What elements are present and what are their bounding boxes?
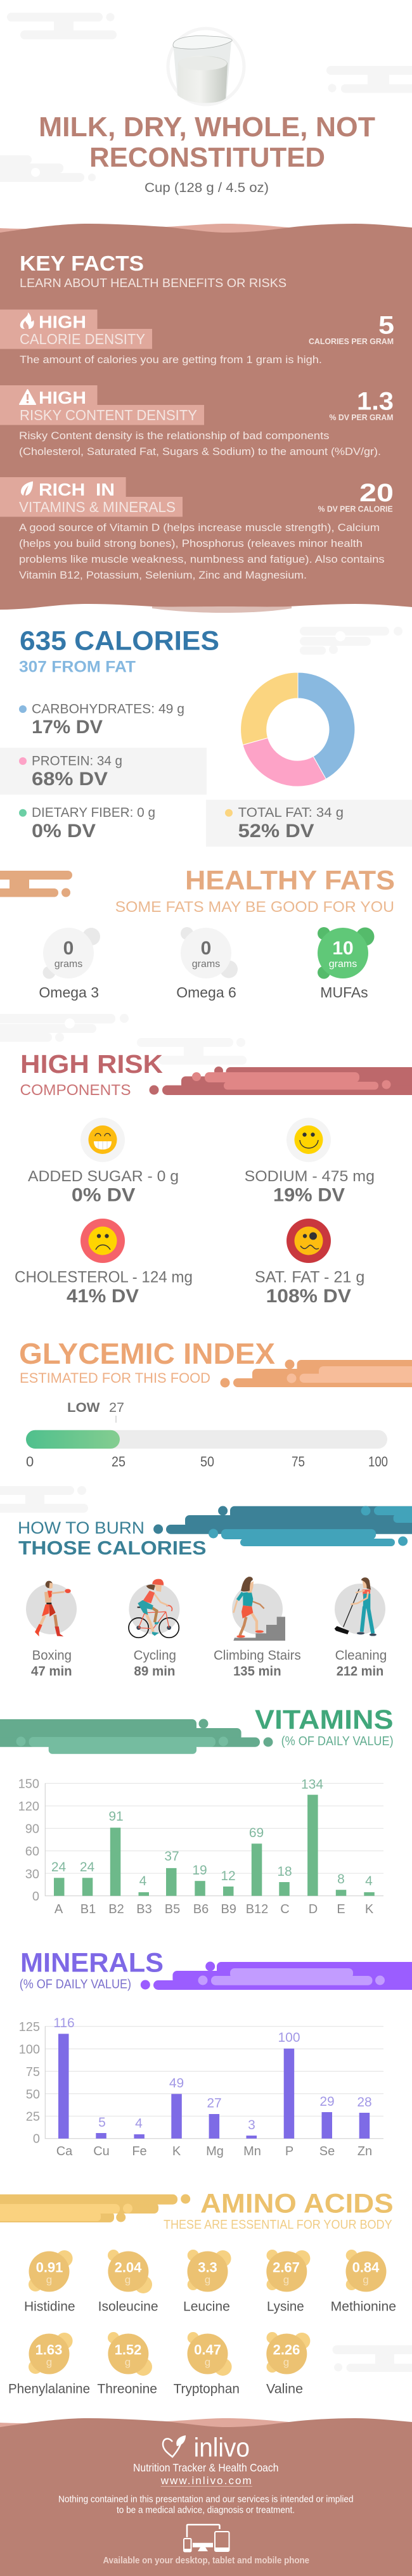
decoration: orange bars	[0, 871, 72, 897]
background cloud: amino acids	[332, 2345, 412, 2372]
amino: leucine: Leucine	[183, 2300, 230, 2314]
bar chart: vitamins: 69	[249, 1826, 264, 1840]
fact: rich in vitamins and minerals: 20	[359, 479, 394, 507]
bar chart: vitamins: 134	[301, 1778, 323, 1792]
fact: calorie density	[0, 309, 394, 366]
decoration: red bars	[150, 1067, 412, 1095]
panel: key facts	[0, 224, 412, 613]
macro: protein: 68% DV	[32, 769, 108, 790]
activity: climbing stairs: Climbing Stairs	[214, 1648, 301, 1663]
bar chart: vitamins: 8	[337, 1872, 345, 1887]
panel: high risk components	[15, 1049, 412, 1307]
fact: risky content density: % DV PER GRAM	[330, 413, 393, 422]
amino: histidine: 0.91	[36, 2260, 63, 2276]
macro: total fat	[225, 805, 344, 842]
fat: omega 3: grams	[55, 959, 82, 970]
fact: rich in vitamins and minerals: problems like muscle weakness, numbness and fatigue). Also contains	[19, 554, 385, 565]
bar chart: minerals: 3	[248, 2118, 255, 2132]
bar chart: minerals: 25	[26, 2110, 40, 2124]
risk: sodium: SODIUM - 475 mg	[245, 1168, 375, 1185]
activity: cleaning	[335, 1577, 387, 1679]
macro: total fat: TOTAL FAT: 34 g	[238, 805, 344, 820]
macro: carbohydrates: 17% DV	[32, 717, 103, 738]
fact: calorie density: HIGH	[39, 312, 86, 332]
bar chart: vitamins: A	[55, 1902, 63, 1916]
icon: flame	[20, 312, 34, 329]
bar chart: vitamins: B2	[108, 1902, 124, 1916]
amino: phenylalanine: Phenylalanine	[8, 2382, 90, 2397]
risk: sodium	[245, 1118, 375, 1205]
activity: cleaning: 212 min	[337, 1664, 383, 1679]
bar chart: minerals: Cu	[93, 2144, 110, 2158]
risk: added sugar	[28, 1118, 179, 1205]
fat: omega 3: 0	[63, 938, 74, 959]
website link: www.inlivo.com	[160, 2475, 252, 2487]
heading: minerals: (% OF DAILY VALUE)	[20, 1978, 131, 1992]
background cloud: right	[326, 66, 412, 93]
glycemic scale bar: 0	[26, 1454, 34, 1470]
fat: MUFAs: MUFAs	[320, 984, 368, 1001]
panel: calories	[0, 626, 412, 847]
icon: glass of milk	[168, 29, 244, 105]
bar chart: minerals: 0	[33, 2132, 40, 2146]
logo: inlivo: inlivo	[194, 2433, 250, 2463]
activity: cleaning: Cleaning	[335, 1648, 387, 1663]
icon: leaf	[21, 482, 33, 496]
heading: healthy fats: SOME FATS MAY BE GOOD FOR YOU	[115, 899, 394, 916]
panel: footer	[0, 2418, 412, 2576]
bar chart: minerals: Mg	[206, 2144, 224, 2158]
macro: dietary fiber	[19, 805, 155, 842]
risk: saturated fat: 108% DV	[266, 1286, 351, 1307]
amino: phenylalanine	[8, 2333, 90, 2397]
background cloud: calories	[300, 627, 402, 655]
heading: burn calories	[18, 1518, 207, 1559]
panel: healthy fats	[0, 866, 395, 1001]
heading: minerals: MINERALS	[20, 1948, 164, 1978]
bar chart: vitamins: 4	[139, 1874, 147, 1888]
fat: MUFAs: 10	[332, 938, 354, 959]
macro: dietary fiber: 0% DV	[32, 821, 96, 842]
icon: person sweeping	[335, 1577, 377, 1636]
activity: boxing: 47 min	[31, 1664, 72, 1679]
bar chart: minerals: 5	[98, 2115, 106, 2130]
amino: valine: 2.26	[273, 2342, 300, 2358]
decoration: yellow bars	[0, 2194, 190, 2222]
bar chart: minerals: Se	[319, 2144, 335, 2158]
amino: threonine: Threonine	[97, 2382, 157, 2397]
heading: minerals	[20, 1948, 164, 1992]
amino: isoleucine: 2.04	[115, 2260, 142, 2276]
fact: rich in vitamins and minerals	[0, 477, 394, 581]
logo: inlivo	[163, 2433, 250, 2463]
bar chart: vitamins: 150	[18, 1778, 39, 1791]
bar chart: minerals: Ca	[56, 2144, 73, 2158]
heading: vitamins: (% OF DAILY VALUE)	[281, 1734, 394, 1748]
fact: rich in vitamins and minerals: RICH IN	[39, 480, 115, 499]
heading: healthy fats: HEALTHY FATS	[185, 866, 395, 896]
amino: valine: g	[283, 2356, 289, 2368]
bar chart: vitamins	[18, 1778, 383, 1916]
serving size: Cup (128 g / 4.5 oz)	[145, 181, 269, 195]
background cloud: top left	[7, 13, 117, 39]
amino: leucine: 3.3	[198, 2260, 217, 2276]
fact: risky content density: Risky Content density is the relationship of bad components	[19, 430, 330, 442]
glycemic value	[67, 1400, 124, 1423]
decoration: teal bars	[153, 1506, 412, 1546]
activity: boxing	[26, 1581, 77, 1679]
glycemic scale bar: 25	[112, 1454, 126, 1470]
activity: climbing stairs: 135 min	[233, 1664, 281, 1679]
fat: omega 6	[176, 927, 238, 1001]
amino: isoleucine: g	[125, 2274, 131, 2286]
bar chart: minerals: K	[172, 2144, 181, 2158]
amino: leucine	[183, 2250, 231, 2314]
heading: high risk: HIGH RISK	[20, 1049, 163, 1079]
fact: risky content density: RISKY CONTENT DENSITY	[20, 407, 197, 423]
amino: tryptophan: 0.47	[194, 2342, 221, 2358]
background cloud: burn	[0, 1486, 88, 1513]
bar chart: vitamins: B9	[221, 1902, 236, 1916]
amino: lysine: Lysine	[267, 2300, 304, 2314]
bar chart: vitamins: 91	[108, 1809, 124, 1824]
amino: threonine: 1.52	[115, 2342, 141, 2358]
bar chart: vitamins: D	[309, 1902, 318, 1916]
heading: high risk: COMPONENTS	[20, 1082, 131, 1099]
bar chart: minerals: 50	[26, 2088, 40, 2102]
panel: minerals	[19, 1948, 412, 2158]
fact: calorie density: The amount of calories you are getting from 1 gram is high.	[20, 354, 322, 366]
icon: boxer	[35, 1581, 71, 1636]
title: RECONSTITUTED	[89, 142, 325, 173]
fact: rich in vitamins and minerals: VITAMINS & MINERALS	[19, 499, 176, 515]
heading: key facts: KEY FACTS	[20, 252, 144, 275]
bar chart: minerals: Zn	[357, 2144, 372, 2158]
disclaimer: to be a medical advice, diagnosis or treatment.	[117, 2506, 295, 2516]
amino: isoleucine	[98, 2250, 158, 2314]
amino: histidine: Histidine	[24, 2300, 75, 2314]
bar chart: minerals	[19, 2016, 383, 2158]
bar chart: vitamins: 19	[192, 1863, 207, 1878]
icon: smiling face	[294, 1125, 323, 1154]
fact: risky content density	[0, 385, 394, 458]
amino: tryptophan: g	[205, 2356, 210, 2368]
amino: threonine: g	[125, 2356, 131, 2368]
panel: amino acids	[0, 2189, 396, 2397]
panel: vitamins	[0, 1705, 394, 1916]
fact: rich in vitamins and minerals: % DV PER CALORIE	[318, 504, 393, 513]
title	[39, 112, 375, 173]
amino: lysine: 2.67	[273, 2260, 300, 2276]
amino: valine	[266, 2332, 310, 2397]
glycemic scale bar: 50	[200, 1454, 214, 1470]
risk: cholesterol: 41% DV	[67, 1286, 139, 1307]
availability note: Available on your desktop, tablet and mobile phone	[103, 2556, 309, 2566]
macro: carbohydrates	[19, 702, 184, 738]
bar chart: vitamins: C	[280, 1902, 290, 1916]
macro: total fat: 52% DV	[238, 821, 314, 842]
risk: saturated fat	[255, 1219, 364, 1307]
fat: omega 3: Omega 3	[39, 984, 99, 1001]
fact: rich in vitamins and minerals: Vitamin B12, Potassium, Selenium, Zinc and Magnesium.	[19, 570, 307, 581]
amino: leucine: g	[205, 2274, 210, 2286]
activity: cycling: 89 min	[134, 1664, 175, 1679]
heading: glycemic index: ESTIMATED FOR THIS FOOD	[20, 1370, 210, 1386]
legend row backgrounds	[0, 748, 412, 847]
background cloud: left	[0, 155, 96, 182]
bar chart: vitamins: 37	[164, 1849, 179, 1864]
bar chart: vitamins: 24	[80, 1860, 94, 1874]
amino: isoleucine: Isoleucine	[98, 2300, 158, 2314]
fat: MUFAs	[318, 927, 374, 1001]
bar chart: minerals: 28	[357, 2095, 372, 2110]
fat: omega 6: 0	[201, 938, 211, 959]
glycemic value: 27	[109, 1400, 124, 1415]
bar chart: minerals: 49	[169, 2076, 184, 2091]
bar chart: minerals: P	[285, 2144, 293, 2158]
risk: added sugar: ADDED SUGAR - 0 g	[28, 1168, 179, 1185]
fat: omega 6: Omega 6	[176, 984, 236, 1001]
activity: boxing: Boxing	[32, 1648, 72, 1663]
fact: risky content density: 1.3	[357, 388, 394, 416]
bar chart: vitamins: B3	[136, 1902, 152, 1916]
icon: stair climber	[233, 1577, 285, 1641]
bar chart: minerals: Fe	[132, 2144, 147, 2158]
heading: amino acids	[164, 2189, 394, 2232]
amino: valine: Valine	[266, 2382, 303, 2397]
fat: omega 6: grams	[192, 959, 220, 970]
heading: calories: 635 CALORIES	[20, 626, 219, 657]
amino: lysine: g	[283, 2274, 289, 2286]
footer background with waves	[0, 2418, 412, 2576]
amino: phenylalanine: g	[46, 2356, 52, 2368]
amino: histidine: g	[46, 2274, 52, 2286]
amino: phenylalanine: 1.63	[35, 2342, 62, 2358]
heading: healthy fats	[115, 866, 395, 916]
bar chart: vitamins: 18	[277, 1864, 292, 1879]
bar chart: minerals: 100	[19, 2043, 40, 2057]
heading: vitamins	[255, 1705, 394, 1748]
disclaimer	[58, 2494, 354, 2516]
bar chart: minerals: 27	[207, 2096, 222, 2111]
fact: calorie density: 5	[378, 312, 394, 340]
icon: sad face	[89, 1227, 117, 1255]
fact: rich in vitamins and minerals: A good source of Vitamin D (helps increase muscle strength), Calcium	[19, 522, 380, 534]
bar chart: vitamins: B12	[246, 1902, 268, 1916]
title: MILK, DRY, WHOLE, NOT	[39, 112, 375, 143]
decoration: purple bars	[141, 1962, 412, 1990]
bar chart: vitamins: 0	[32, 1890, 39, 1904]
heading: vitamins: VITAMINS	[255, 1705, 394, 1735]
glycemic scale bar	[26, 1430, 388, 1470]
heading: key facts	[20, 252, 286, 290]
amino: threonine	[97, 2332, 157, 2397]
heading: amino acids: THESE ARE ESSENTIAL FOR YOUR BODY	[164, 2218, 392, 2232]
bar chart: vitamins: B5	[165, 1902, 180, 1916]
bar chart: vitamins: E	[337, 1902, 345, 1916]
risk: saturated fat: SAT. FAT - 21 g	[255, 1268, 364, 1286]
amino: methionine: 0.84	[352, 2260, 380, 2276]
risk: cholesterol	[15, 1219, 193, 1307]
amino: methionine: Methionine	[331, 2300, 396, 2314]
risk: added sugar: 0% DV	[72, 1184, 135, 1205]
panel: glycemic index	[19, 1337, 412, 1470]
bar chart: vitamins: 24	[51, 1860, 66, 1874]
glycemic scale bar: 75	[292, 1454, 305, 1470]
donut chart	[241, 672, 355, 786]
fact: calorie density: CALORIE DENSITY	[20, 331, 145, 347]
decoration: orange bars	[221, 1360, 412, 1388]
fact: rich in vitamins and minerals: (helps you build strong bones), Phosphorus (releaves minor health	[19, 538, 363, 549]
panel background with waves	[0, 224, 412, 613]
background cloud: high risk left	[0, 1014, 129, 1042]
icon: warning triangle	[20, 390, 35, 404]
bar chart: minerals: 100	[278, 2030, 300, 2045]
bar chart: vitamins: 120	[18, 1800, 39, 1814]
heading: glycemic index	[19, 1337, 275, 1386]
risk: cholesterol: CHOLESTEROL - 124 mg	[15, 1268, 193, 1286]
amino: histidine	[24, 2250, 75, 2314]
macro: protein	[19, 754, 122, 790]
macro: dietary fiber: DIETARY FIBER: 0 g	[32, 805, 155, 820]
activity: climbing stairs	[214, 1577, 301, 1679]
fact: risky content density: HIGH	[39, 388, 86, 407]
bar chart: minerals: 116	[53, 2016, 75, 2030]
amino: tryptophan: Tryptophan	[174, 2382, 240, 2397]
heading: calories: 307 FROM FAT	[19, 658, 136, 676]
bar chart: vitamins: 30	[25, 1868, 39, 1881]
macro: protein: PROTEIN: 34 g	[32, 754, 122, 769]
bar chart: minerals: 29	[319, 2094, 335, 2109]
icon: grinning face	[89, 1125, 117, 1154]
heading: calories	[19, 626, 219, 676]
glycemic value: LOW	[67, 1400, 100, 1415]
fact: risky content density: (Cholesterol, Saturated Fat, Sugars & Sodium) to the amount (%DV/gr).	[19, 446, 381, 458]
heading: glycemic index: GLYCEMIC INDEX	[19, 1337, 275, 1370]
bar chart: vitamins: B6	[193, 1902, 209, 1916]
macro: carbohydrates: CARBOHYDRATES: 49 g	[32, 702, 184, 717]
bar chart: minerals: Mn	[243, 2144, 261, 2158]
bar chart: vitamins: 4	[365, 1874, 373, 1888]
icon: cyclist	[129, 1579, 179, 1637]
glycemic scale bar: 100	[368, 1454, 388, 1470]
bar chart: vitamins: K	[365, 1902, 374, 1916]
heading: burn calories: THOSE CALORIES	[18, 1537, 207, 1559]
heading: high risk	[20, 1049, 163, 1099]
bar chart: minerals: 75	[26, 2065, 40, 2079]
amino: methionine	[331, 2250, 396, 2314]
heading: key facts: LEARN ABOUT HEALTH BENEFITS OR RISKS	[20, 277, 286, 290]
disclaimer: Nothing contained in this presentation and our services is intended or implied	[58, 2494, 354, 2504]
fact: calorie density: CALORIES PER GRAM	[309, 336, 394, 346]
fat: omega 3	[39, 928, 100, 1001]
bar chart: minerals: 4	[135, 2117, 143, 2131]
heading: amino acids: AMINO ACIDS	[200, 2189, 394, 2219]
amino: lysine	[266, 2250, 310, 2314]
bar chart: vitamins: B1	[80, 1902, 96, 1916]
bar chart: vitamins: 90	[25, 1823, 39, 1836]
icon: devices	[184, 2525, 229, 2551]
bar chart: minerals: 125	[19, 2020, 40, 2034]
bar chart: vitamins: 12	[221, 1869, 236, 1883]
amino: tryptophan	[174, 2332, 240, 2397]
icon: worried face	[294, 1227, 323, 1255]
background cloud: high risk right	[137, 1038, 247, 1065]
fat: MUFAs: grams	[329, 959, 357, 970]
activity: cycling	[129, 1579, 179, 1679]
decoration: green bars	[0, 1719, 273, 1754]
bar chart: vitamins: 60	[25, 1845, 39, 1859]
activity: cycling: Cycling	[134, 1648, 176, 1663]
tagline: Nutrition Tracker & Health Coach	[133, 2461, 279, 2474]
amino: methionine: g	[363, 2274, 369, 2286]
panel: how to burn those calories	[18, 1506, 412, 1679]
heading: burn calories: HOW TO BURN	[18, 1518, 145, 1537]
risk: sodium: 19% DV	[273, 1184, 345, 1205]
